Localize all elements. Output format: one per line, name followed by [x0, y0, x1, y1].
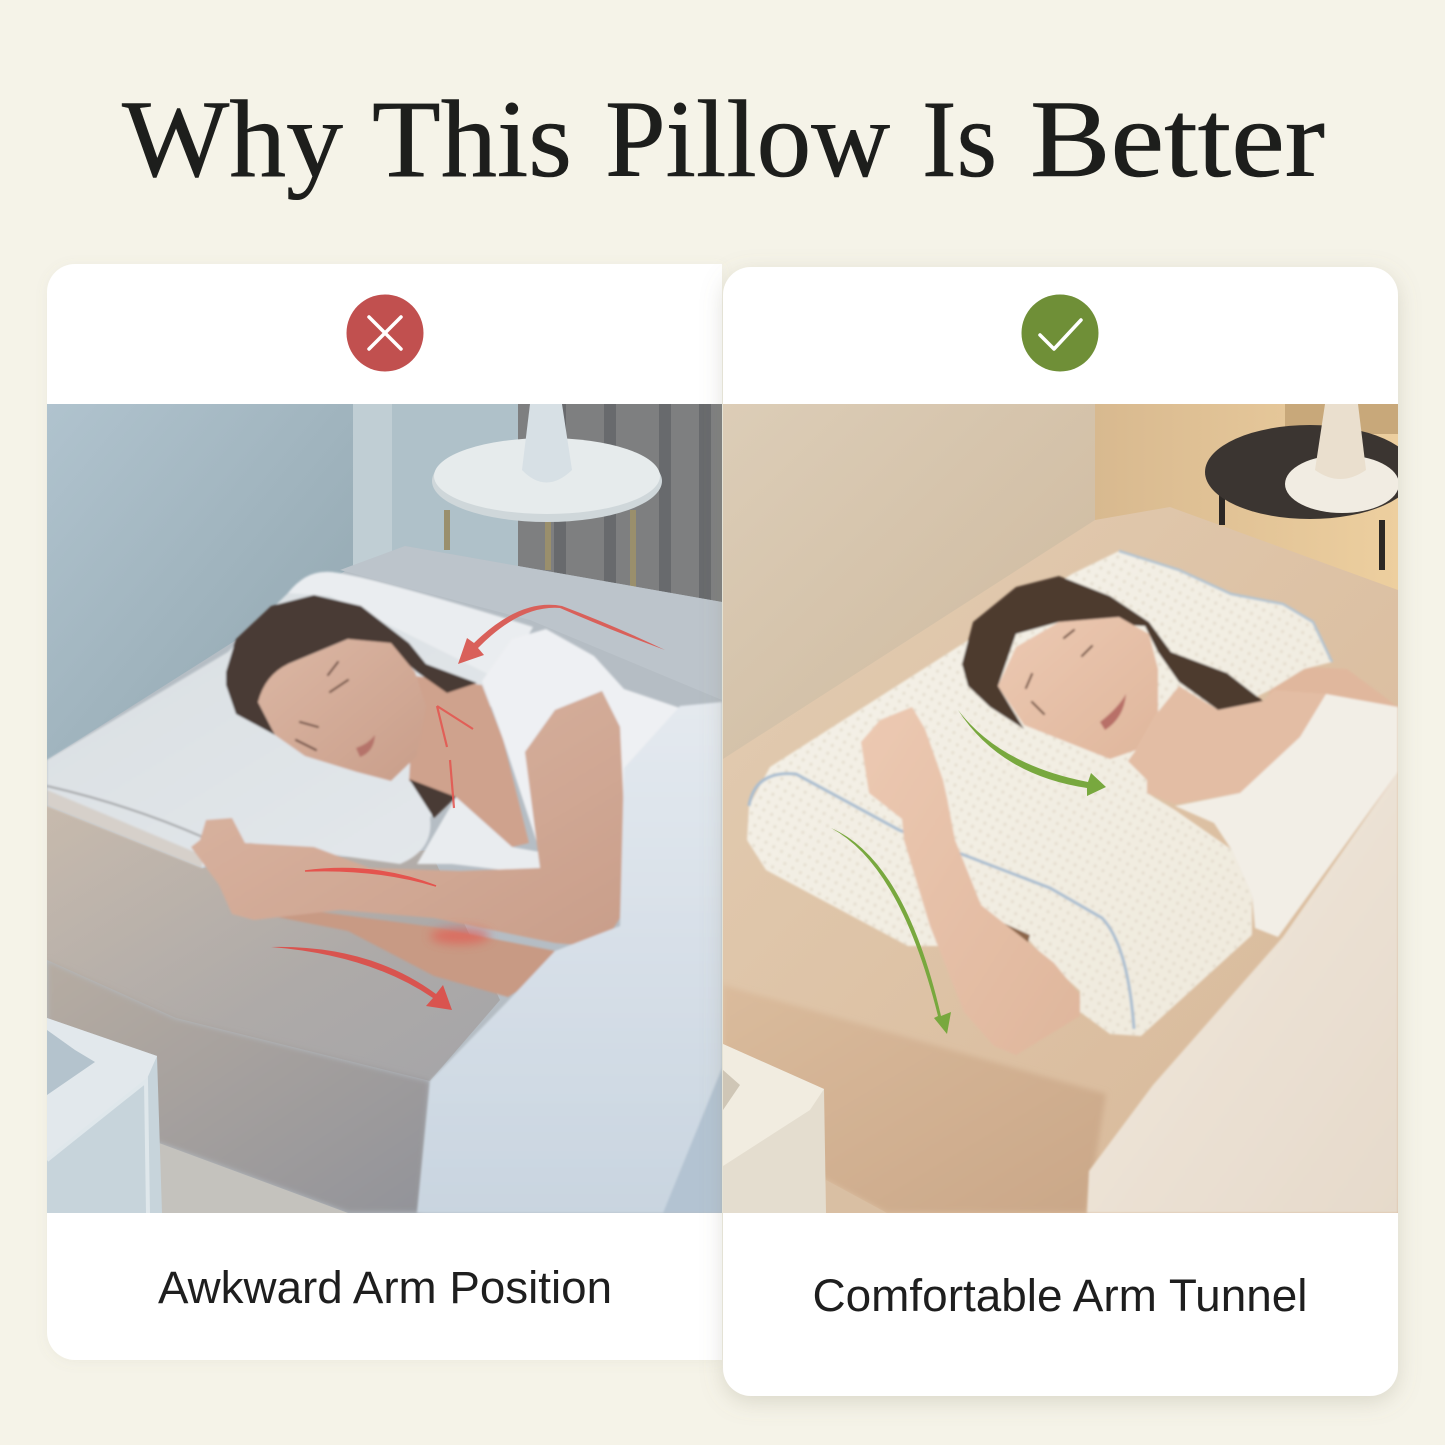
shirt	[482, 628, 679, 840]
icon: green check badge	[1022, 294, 1098, 372]
left card background	[47, 264, 722, 1360]
pain glow on elbow	[430, 928, 490, 944]
arrow: arm relief	[831, 828, 951, 1034]
face	[258, 639, 426, 781]
caption: awkward arm position: Awkward Arm Position	[158, 1262, 612, 1313]
tunnel opening	[1004, 923, 1031, 942]
pain lines on neck	[437, 706, 473, 808]
arrow: neck support	[958, 710, 1106, 796]
camisole	[1175, 694, 1398, 937]
face	[998, 617, 1158, 759]
nightstand	[47, 1018, 162, 1213]
neck and chest skin	[1128, 686, 1264, 762]
title: Why	[122, 78, 343, 200]
nightstand	[723, 1044, 826, 1213]
arm and hand	[861, 707, 1080, 1055]
icon: red cross badge	[346, 294, 424, 372]
panel: comfortable position (this pillow)	[723, 267, 1415, 1396]
lower forearm	[262, 910, 555, 997]
title: Better	[1030, 78, 1325, 200]
arrow: pressure top	[458, 605, 665, 664]
hair	[226, 595, 477, 735]
neck and chest skin	[409, 676, 529, 847]
title: Is	[922, 78, 997, 200]
far pillow highlight	[288, 572, 533, 680]
title: Pillow	[605, 78, 890, 200]
title	[122, 78, 1325, 200]
arrow: pressure bottom	[271, 947, 452, 1010]
panel: awkward position (without pillow)	[47, 264, 722, 1360]
duvet	[1087, 772, 1398, 1213]
photo: woman sleeping comfortably on arm tunnel pillow	[723, 404, 1415, 1213]
hair	[962, 576, 1263, 729]
duvet	[417, 702, 722, 1213]
upper arm and hand	[191, 691, 624, 947]
photo: woman sleeping on regular pillow in pain	[47, 404, 722, 1213]
memory pillow body	[747, 551, 1332, 1036]
caption: comfortable arm tunnel: Comfortable Arm Tunnel	[812, 1270, 1308, 1321]
title: This	[372, 78, 572, 200]
far shoulder	[1276, 668, 1390, 704]
right card background	[723, 267, 1398, 1396]
pain line on forearm	[305, 869, 436, 886]
